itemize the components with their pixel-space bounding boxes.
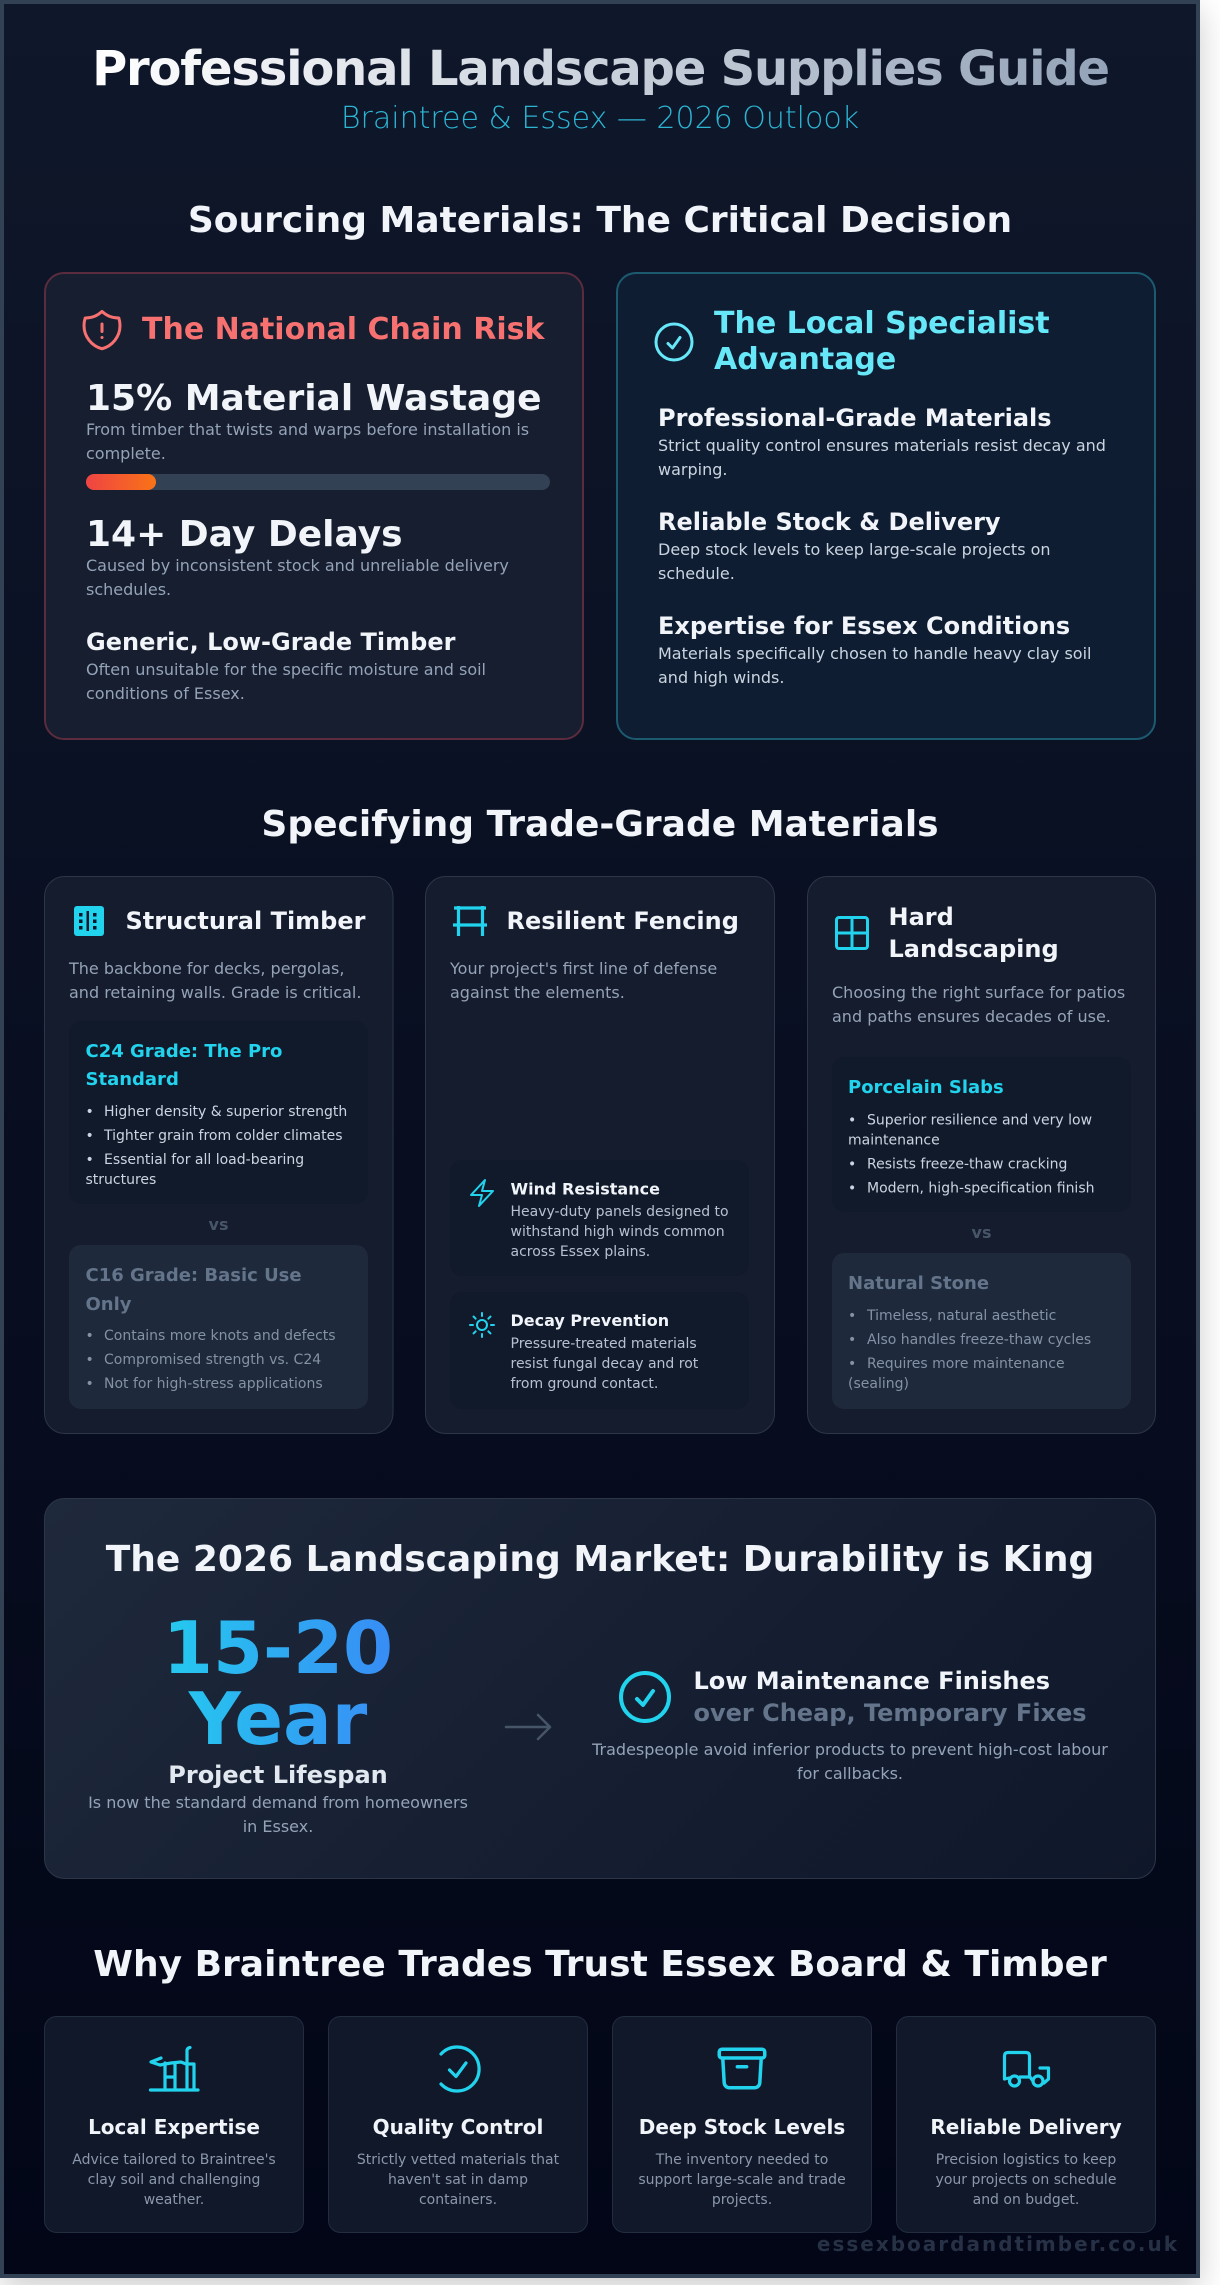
card: reliable delivery: Reliable Delivery bbox=[930, 2115, 1122, 2139]
text: tradespeople description: for callbacks. bbox=[797, 1764, 903, 1783]
box: decay prevention: Decay Prevention bbox=[510, 1311, 669, 1330]
stat description: Is now the standard demand from homeowners bbox=[88, 1793, 468, 1812]
text: delays description: Caused by inconsistent stock and unreliable delivery bbox=[86, 556, 509, 575]
subtitle: Braintree & Essex — 2026 Outlook bbox=[341, 101, 859, 136]
stat: generic timber: Generic, Low-Grade Timber bbox=[86, 628, 456, 656]
item: professional-grade: Strict quality control ensures materials resist decay and bbox=[658, 436, 1106, 455]
box: porcelain slabs bbox=[832, 1057, 1131, 1212]
box: C24 grade: Standard bbox=[86, 1069, 179, 1090]
card: local expertise: Advice tailored to Braintree's bbox=[72, 2152, 276, 2168]
icon: check circle bbox=[656, 324, 692, 360]
text: low maintenance: Low Maintenance Finishes bbox=[694, 1667, 1050, 1695]
item: expertise: and high winds. bbox=[658, 668, 784, 687]
card: quality control: containers. bbox=[419, 2192, 497, 2208]
item: expertise: Expertise for Essex Conditions bbox=[658, 612, 1070, 640]
stat description: in Essex. bbox=[243, 1817, 313, 1836]
box: wind resistance: Wind Resistance bbox=[510, 1180, 660, 1198]
box: porcelain slabs: • bbox=[848, 1112, 856, 1128]
card: quality control: Quality Control bbox=[373, 2115, 543, 2139]
stat: 15-20 year: 15-20 bbox=[163, 1606, 393, 1690]
card title: Resilient Fencing bbox=[506, 907, 739, 935]
stat label: Project Lifespan bbox=[168, 1761, 388, 1789]
card: reliable delivery: your projects on schedule bbox=[936, 2172, 1116, 2188]
footer url: essexboardandtimber.co.uk bbox=[817, 2232, 1179, 2256]
box: natural stone: Timeless, natural aesthetic bbox=[866, 1308, 1056, 1324]
card description: The backbone for decks, pergolas, bbox=[68, 959, 344, 978]
box: porcelain slabs: Modern, high-specification finish bbox=[867, 1180, 1094, 1196]
box: natural stone: Also handles freeze-thaw cycles bbox=[867, 1332, 1091, 1348]
panel: 2026 market bbox=[44, 1498, 1156, 1878]
card description: and paths ensures decades of use. bbox=[832, 1007, 1111, 1026]
item: professional-grade: Professional-Grade Materials bbox=[658, 404, 1052, 432]
box: natural stone: • bbox=[848, 1308, 856, 1324]
heading: The 2026 Landscaping Market: Durability is King bbox=[106, 1539, 1094, 1580]
box: C16 grade: Only bbox=[86, 1294, 132, 1315]
card: deep stock levels: projects. bbox=[712, 2192, 772, 2208]
box: C24 grade: • bbox=[86, 1128, 94, 1144]
box: wind resistance: across Essex plains. bbox=[510, 1244, 650, 1260]
panel: resilient fencing bbox=[426, 876, 774, 1434]
box: C24 grade: Essential for all load-bearing bbox=[104, 1152, 304, 1168]
box: C16 grade: • bbox=[86, 1352, 94, 1368]
box: porcelain slabs: Superior resilience and very low bbox=[867, 1112, 1092, 1128]
icon: check circle bbox=[621, 1673, 669, 1721]
vs label: vs bbox=[972, 1223, 991, 1242]
panel: national chain risk bbox=[45, 273, 583, 739]
icon: paving grid bbox=[836, 918, 868, 948]
card: deep stock levels: Deep Stock Levels bbox=[639, 2115, 845, 2139]
title: Professional Landscape Supplies Guide bbox=[92, 41, 1109, 97]
text: timber description: Often unsuitable for the specific moisture and soil bbox=[86, 660, 486, 679]
card: local expertise: weather. bbox=[144, 2192, 204, 2208]
heading: sourcing materials: Sourcing Materials: The Critical Decision bbox=[188, 200, 1012, 241]
box: porcelain slabs: Porcelain Slabs bbox=[848, 1077, 1004, 1098]
progress bar bbox=[86, 474, 550, 490]
text: wastage description: complete. bbox=[86, 444, 166, 463]
item: reliable stock bbox=[658, 508, 1051, 583]
box: C16 grade: Compromised strength vs. C24 bbox=[104, 1352, 321, 1368]
box: wind resistance bbox=[450, 1160, 749, 1276]
box: natural stone: • bbox=[848, 1356, 856, 1372]
box: decay prevention: Pressure-treated materials bbox=[510, 1336, 697, 1352]
item: professional-grade bbox=[658, 404, 1106, 479]
icon: shield warning bbox=[84, 311, 120, 349]
box: C24 grade: C24 Grade: The Pro bbox=[86, 1041, 282, 1062]
card: reliable delivery: and on budget. bbox=[973, 2192, 1079, 2208]
card description: Choosing the right surface for patios bbox=[832, 983, 1125, 1002]
box: decay prevention: from ground contact. bbox=[510, 1376, 658, 1392]
card title: Landscaping bbox=[888, 935, 1059, 963]
box: wind resistance: withstand high winds common bbox=[510, 1224, 725, 1240]
icon: timber bbox=[74, 906, 104, 936]
box: wind resistance: Heavy-duty panels designed to bbox=[510, 1204, 729, 1220]
panel title: The National Chain Risk bbox=[142, 312, 545, 347]
box: natural stone: • bbox=[848, 1332, 856, 1348]
card: deep stock levels bbox=[612, 2016, 872, 2232]
box: porcelain slabs: Resists freeze-thaw cracking bbox=[867, 1156, 1067, 1172]
item: expertise bbox=[658, 612, 1091, 687]
text: wastage description: From timber that twists and warps before installation is bbox=[86, 420, 529, 439]
box: porcelain slabs: • bbox=[848, 1156, 856, 1172]
box: natural stone bbox=[832, 1253, 1131, 1409]
box: porcelain slabs: maintenance bbox=[848, 1132, 940, 1148]
item: expertise: Materials specifically chosen to handle heavy clay soil bbox=[658, 644, 1091, 663]
card title: Structural Timber bbox=[126, 907, 366, 935]
text: timber description: conditions of Essex. bbox=[86, 684, 245, 703]
box: C24 grade bbox=[69, 1021, 368, 1204]
item: reliable stock: Deep stock levels to keep large-scale projects on bbox=[658, 540, 1051, 559]
box: C24 grade: • bbox=[86, 1104, 94, 1120]
box: decay prevention bbox=[450, 1292, 749, 1409]
card: quality control: haven't sat in damp bbox=[388, 2172, 528, 2188]
stat: 15-20 year: Year bbox=[188, 1677, 368, 1761]
text: low maintenance: over Cheap, Temporary Fixes bbox=[694, 1699, 1087, 1727]
card title: Hard bbox=[888, 903, 954, 931]
stat: day delays: 14+ Day Delays bbox=[86, 514, 403, 555]
icon: building bbox=[150, 2048, 198, 2090]
panel: local specialist advantage bbox=[617, 273, 1155, 739]
panel: hard landscaping bbox=[808, 876, 1156, 1434]
vs label: vs bbox=[209, 1215, 228, 1234]
box: C24 grade: Higher density & superior strength bbox=[104, 1104, 347, 1120]
card description: Your project's first line of defense bbox=[449, 959, 717, 978]
box: C16 grade: • bbox=[86, 1376, 94, 1392]
stat: material wastage: 15% Material Wastage bbox=[86, 378, 542, 419]
box: C16 grade: Not for high-stress applications bbox=[104, 1376, 323, 1392]
icon: fence bbox=[453, 906, 487, 936]
box: natural stone: Natural Stone bbox=[848, 1273, 989, 1294]
icon: archive box bbox=[719, 2049, 765, 2088]
item: reliable stock: Reliable Stock & Delivery bbox=[658, 508, 1001, 536]
card: local expertise: Local Expertise bbox=[88, 2115, 260, 2139]
card: local expertise bbox=[44, 2016, 304, 2232]
box: decay prevention: resist fungal decay and rot bbox=[510, 1356, 699, 1372]
item: professional-grade: warping. bbox=[658, 460, 727, 479]
box: C16 grade bbox=[69, 1245, 368, 1409]
box: C24 grade: Tighter grain from colder climates bbox=[103, 1128, 342, 1144]
text: delays description: schedules. bbox=[86, 580, 171, 599]
heading: trade-grade materials: Specifying Trade-Grade Materials bbox=[261, 804, 939, 845]
panel title: Advantage bbox=[714, 342, 896, 377]
box: C16 grade: C16 Grade: Basic Use bbox=[86, 1265, 302, 1286]
card: deep stock levels: The inventory needed to bbox=[655, 2152, 828, 2168]
card: quality control: Strictly vetted materials that bbox=[357, 2152, 560, 2168]
box: natural stone: Requires more maintenance bbox=[867, 1356, 1065, 1372]
card: quality control bbox=[328, 2016, 588, 2232]
card: local expertise: clay soil and challenging bbox=[88, 2172, 260, 2188]
panel title: The Local Specialist bbox=[714, 306, 1050, 341]
text: tradespeople description: Tradespeople avoid inferior products to prevent high-cost labour bbox=[591, 1740, 1108, 1759]
box: C16 grade: • bbox=[86, 1328, 94, 1344]
card description: and retaining walls. Grade is critical. bbox=[69, 983, 361, 1002]
box: natural stone: (sealing) bbox=[848, 1376, 909, 1392]
box: C24 grade: structures bbox=[86, 1172, 156, 1188]
icon: check ring bbox=[441, 2047, 479, 2091]
card: deep stock levels: support large-scale and trade bbox=[638, 2172, 846, 2188]
card description: against the elements. bbox=[450, 983, 625, 1002]
panel: structural timber bbox=[44, 876, 393, 1434]
item: reliable stock: schedule. bbox=[658, 564, 735, 583]
heading: why braintree trades trust: Why Braintree Trades Trust Essex Board & Timber bbox=[93, 1944, 1107, 1985]
box: porcelain slabs: • bbox=[848, 1180, 856, 1196]
box: C16 grade: Contains more knots and defects bbox=[104, 1328, 336, 1344]
icon: truck bbox=[1004, 2052, 1048, 2086]
box: C24 grade: • bbox=[86, 1152, 94, 1168]
card: reliable delivery bbox=[896, 2016, 1156, 2232]
arrow bbox=[506, 1715, 550, 1739]
card: reliable delivery: Precision logistics to keep bbox=[936, 2152, 1116, 2168]
